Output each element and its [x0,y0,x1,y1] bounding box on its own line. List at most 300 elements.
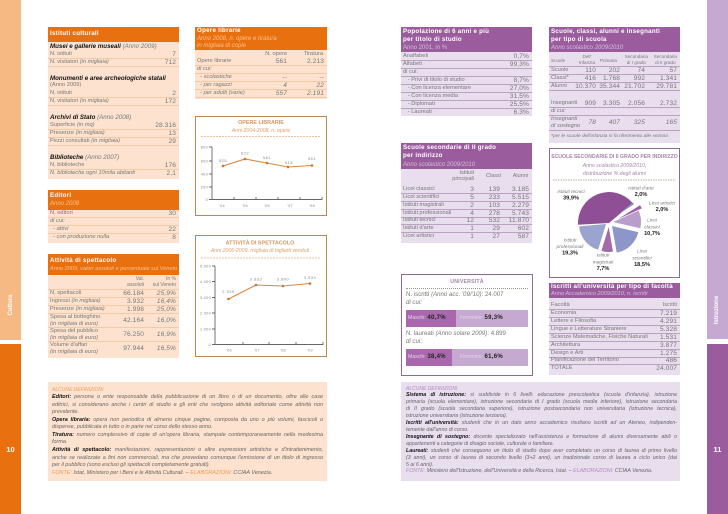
table rows: sul Veneto [153,282,176,288]
table: Monumenti: N. istituti [50,90,72,96]
table rows: N. editori [50,210,73,216]
pie labels: magistrali [593,260,614,266]
table rows: 4 [283,82,287,89]
table rows: 602 [518,225,529,232]
table rows: Licei scientifici [403,194,439,200]
panel: Attività di spettacolo [48,254,179,358]
table rows: 25,5% [510,101,529,108]
pie labels: Istituti tecnici [557,189,586,195]
panel header: per indirizzo [403,152,443,159]
definitions text [406,386,678,474]
table rows: 11.870 [509,217,529,224]
table rows: - Con licenza elementare [408,85,471,91]
axis labels: 1.000 [200,328,211,332]
definitions text: anche se realizzate a fini non commerciali, ma che prevedano comunque l'emissione di un titolo di ingresso [52,454,323,460]
panel header: Popolazione di 6 anni e più [403,28,489,35]
table rows: 5.515 [512,194,529,201]
data line [227,282,311,300]
table: Monumenti: (Anno 2009) [50,82,81,88]
table rows: 16,9% [157,331,176,338]
text: laureati: N. laureati (Anno solare 2009): 4.899 [406,330,506,337]
table rows: Classi [486,173,501,179]
table rows: 5 [470,194,474,201]
panel: Alcune definizioni (cultura) [48,382,327,481]
panel: Istituti culturali [48,27,179,179]
axis labels: '08 [309,204,315,208]
axis labels: 200 [201,186,208,190]
definitions text [52,387,323,476]
panel header: Anno 2001, in % [403,45,447,51]
table rows: di cui: [551,108,566,114]
table rows: 110 [585,67,596,74]
table rows: 416 [585,75,596,82]
table rows: 24.007 [656,365,677,372]
panel: Alcune definizioni (istruzione) [401,382,680,481]
table rows: 139 [489,186,500,193]
panel header: Scuole secondarie di II grado [403,144,496,151]
table rows: Istituti d'arte [403,225,433,231]
panel header: Anno 2008 [50,201,79,207]
definitions text: appartenenti a categorie di disagio sociale, culturale o familiare. [406,441,554,447]
definitions text: Attività di spettacolo: manifestazioni, rappresentazioni o altre espressioni artistiche e d'intrattenimento, [52,447,323,453]
panel header: Istituti culturali [50,30,99,37]
axis labels: '06 [264,204,270,208]
table rows: 29.781 [656,83,677,90]
table rows: 2.056 [628,100,645,107]
panel: Scuole, classi, alunni e insegnanti [549,27,680,143]
table: Musei: 7 [172,51,176,58]
table rows: 5.328 [660,326,677,333]
table rows [195,51,327,98]
table: Archivi di Stato: 13 [168,130,176,137]
table rows: 25,0% [157,306,176,313]
table: Archivi di Stato: 29 [168,138,176,145]
table rows: 76.250 [123,331,144,338]
panel header [48,27,179,42]
table rows: Scuole [551,58,565,63]
chart title: OPERE LIBRARIE [238,120,284,126]
table rows: 22 [316,82,324,89]
table rows: Design e Arti [551,350,583,356]
data labels: 525 [219,158,227,163]
table rows: Ingressi (in migliaia) [50,298,101,304]
table rows: di cui: [50,218,65,224]
table rows [549,54,680,139]
table: Musei: 712 [165,59,176,66]
table rows: Scienze Matematiche, Fisiche Naturali [551,334,648,340]
data labels: 518 [285,160,293,165]
table rows: 25,9% [157,290,176,297]
table rows: 2.279 [512,202,529,209]
panel header: Anno scolastico 2009/2010 [551,45,623,51]
table rows: Lettere e Filosofia [551,318,596,324]
table: Musei: Musei e gallerie museali (Anno 2009) [50,43,157,50]
axis labels [200,264,313,352]
definitions text: primaria (scuola elementare), istruzione secondaria di I grado (scuola media inferiore), istruzione secondaria [406,399,677,405]
table: Archivi di Stato: Pezzi consultati (in migliaia) [50,138,120,144]
table rows: 909 [585,100,596,107]
table rows: Val. [136,276,144,282]
definitions text: Insegnante di sostegno: docente specializzato nell'assistenza e formazione di alunni diversamente abili o [406,434,677,440]
table rows: 27,0% [510,85,529,92]
panel header: Scuole, classi, alunni e insegnanti [551,28,660,35]
table rows: 3.932 [127,298,144,305]
table rows: 2.191 [307,90,324,97]
table: Biblioteche: 176 [165,162,176,169]
definitions text: forma. [52,439,67,445]
axis labels: '08 [280,348,286,352]
table: Monumenti: Monumenti e aree archeologiche statali [50,75,166,82]
table rows: di cui: [197,66,212,72]
table rows: Istituti magistrali [403,202,444,208]
stacked bar: laureati per genere: Maschi: 38,4% [408,354,446,360]
table rows: 22 [168,226,176,233]
chart title: Anni 2004-2008, n. opere [231,128,290,134]
panel header: Iscritti all'università per tipo di facoltà [551,283,673,290]
data line [222,158,313,168]
table: Monumenti: 172 [165,98,176,105]
table rows: (in migliaia di euro) [50,334,98,340]
panel header: Editori [50,192,71,199]
definitions text: prevalente. [52,409,79,415]
pie labels: 2,0% [635,192,647,198]
definitions text: di II grado (scuola secondaria superiore), istruzione postsecondaria non universitaria (istruzione tecnica), [406,406,677,412]
axis labels: 4.000 [200,280,211,284]
panel: Università [401,274,533,376]
definitions text: dispense, pubblicata in tutto o in parte nel corso dello stesso anno. [52,424,213,430]
table rows: assoluti [127,282,144,288]
table rows: 3.185 [512,186,529,193]
table rows: 10.370 [575,83,596,90]
table rows: Scuole [551,67,568,73]
table rows: 2.732 [660,100,677,107]
table rows: Architettura [551,342,580,348]
table: Archivi di Stato: 28.316 [155,122,176,129]
table rows: 21.702 [624,83,645,90]
table rows: 587 [518,233,529,240]
table rows: Economia [551,310,576,316]
table rows: Istituti [460,170,474,176]
definitions text: FONTE: Istat, Ministero per i Beni e le Attività Culturali. – ELABORAZIONI: CCIAA Venezia. [52,470,272,476]
panel header: Anno Accademico 2009/2010, n. iscritti [551,291,648,297]
table rows: 57 [669,67,677,74]
data labels: 561 [308,156,316,161]
table rows: 8,7% [514,77,529,84]
axis labels: 3.000 [200,296,211,300]
axis labels [201,146,315,208]
table rows: Alunni [551,83,567,89]
table: Archivi di Stato: Archivi di Stato (Anno 2008) [50,114,131,121]
table rows: Volume d'affari [50,342,87,348]
panel header [48,190,179,210]
table: Monumenti [48,75,179,106]
axis labels: 400 [201,172,208,176]
table: Biblioteche: N. biblioteche [50,162,84,168]
table rows: Spesa del pubblico [50,328,98,334]
stacked bar: iscritti per genere [406,310,528,327]
table rows: 5.743 [512,210,529,217]
table rows: *per le scuole dell'infanzia si fa riferimento alle sezioni. [551,134,669,139]
table rows [48,210,179,241]
table rows: Secondaria [654,54,677,59]
table rows: Secondaria [625,54,648,59]
table rows: di cui: [403,69,418,75]
panel: Opere librarie [195,27,327,99]
pie labels: 39,9% [563,196,579,202]
table rows: 992 [634,75,645,82]
table: Archivi di Stato: Superficie (in mq) [50,122,95,128]
axis labels: 5.000 [200,264,211,268]
table rows: 1.341 [660,75,677,82]
panel header [401,143,532,169]
text: iscritti: N. iscritti (Anno acc. '09/'10): 24.007 [406,291,504,298]
table rows: principali [452,176,474,182]
table rows: 3.877 [660,342,677,349]
data labels: 622 [241,150,249,156]
axes [212,266,323,345]
pie labels: 7,7% [597,266,609,272]
table rows: Insegnanti [551,116,577,122]
panel header: Anno scolastico 2009/2010 [403,162,475,168]
text: iscritti [406,291,504,306]
pie labels: 2,0% [656,207,668,213]
chart title [210,240,310,254]
table: Biblioteche: N. biblioteche ogni 10mila abitanti [50,170,135,176]
table rows: 3.305 [603,100,620,107]
table rows: 16,5% [157,345,176,352]
table: Monumenti: N. visitatori (in migliaia) [50,98,109,104]
pie slices [578,192,642,253]
page tab: 11: 11 [714,445,721,454]
definitions text: per il pubblico (sono esclusi gli spettacoli completamente gratuiti). [52,462,210,468]
table rows: Licei artistici [403,233,434,239]
table rows: 532 [489,217,500,224]
table rows: 1.998 [127,306,144,313]
pie title: distribuzione % degli alunni [583,171,647,177]
axis labels: 800 [201,146,208,150]
table rows: - per adulti (varie) [200,90,245,96]
table rows [401,170,532,240]
side label: Istruzione: Istruzione [714,296,720,324]
table rows: Insegnanti [551,100,577,106]
panel: Iscritti all'università per tipo di facoltà [549,283,680,375]
table rows [549,302,680,372]
table rows: 0,7% [514,53,529,60]
data labels: 3.800 [277,276,290,282]
table rows: 16,0% [157,317,176,324]
table: Archivi di Stato: Presenze (in migliaia) [50,130,105,136]
definitions text: Editori: persona o ente responsabile della pubblicazione di un libro o di un documento, oltre alle case [52,394,323,400]
table rows: - con produzione nulla [53,234,109,240]
table rows: Presenze (in migliaia) [50,306,105,312]
table rows: (in migliaia di euro) [50,320,98,326]
axes [209,147,322,200]
pie title: Anno scolastico 2009/2010, [582,163,646,169]
table rows: Facoltà [551,302,570,308]
table rows: 97.944 [123,345,144,352]
definitions text: editrici, si considerano anche i centri di studio e gli enti che svolgono attività editoriale come attività non [52,402,323,408]
panel header [549,27,680,52]
data labels: 2.936 [222,289,235,294]
table rows: - Diplomati [408,101,435,107]
table rows: 66.184 [123,290,144,297]
definitions text: istruzione universitaria (istruzione terziaria). [406,413,507,419]
pie title: SCUOLE SECONDARIE DI II GRADO PER INDIRIZZO [551,154,678,160]
table rows: 6,3% [514,109,529,116]
panel header [549,283,680,298]
table rows: Spesa al botteghino [50,314,100,320]
pie labels: 18,5% [634,262,650,268]
table rows: 7.219 [660,310,677,317]
definitions text: ALCUNE DEFINIZIONI [406,386,457,392]
data labels [219,150,316,165]
table: Musei: N. visitatori (in migliaia) [50,59,109,65]
axis labels: '09 [307,348,313,352]
panel header: Anno 2009, valori assoluti e percentuale sul Veneto [50,266,177,272]
axis labels: 600 [201,160,208,164]
panel header [195,27,327,50]
table rows: N. spettacoli [50,290,81,296]
data labels: 581 [263,155,271,160]
definitions text: Laureati: studenti che conseguono un titolo di studio dopo aver completato un corso di laurea di primo livello [406,448,677,454]
side band: Cultura [0,0,21,340]
panel header [48,254,179,275]
table rows: 35.344 [599,83,620,90]
table rows: 325 [634,119,645,126]
panel header: per tipo di scuola [551,36,607,43]
table rows: -- [282,74,287,81]
table rows: In % [166,276,176,282]
data labels [222,275,317,294]
text: laureati [406,330,506,345]
table rows: Classi* [551,75,569,81]
table: Monumenti: 2 [172,90,176,97]
table: Archivi di Stato [48,114,179,146]
pie labels [556,186,676,272]
table rows: Iscritti [663,302,677,308]
table rows: 103 [489,202,500,209]
definitions text: Tiratura: numero complessivo di copie di un'opera libraria, stampate contemporaneamente nella medesima [52,432,323,438]
panel: Scuole secondarie di II grado [401,143,532,243]
table rows: 1 [470,233,474,240]
definitions text: ALCUNE DEFINIZIONI [52,387,103,393]
side label: Cultura: Cultura [8,294,14,316]
page tab: 10: 10 [6,445,15,454]
definitions text: 5 ai 6 anni). [406,462,433,468]
pie labels: scientifici [632,256,653,262]
pie labels: Licei artistici [649,200,676,206]
definitions text: temente dall'anno di corso. [406,427,469,433]
table rows: Alunni [513,173,528,179]
page tab: 10 [0,344,21,514]
table rows: 4 [470,210,474,217]
table rows [401,53,532,116]
table rows: -- [319,74,324,81]
pie labels: Licei [637,248,648,254]
definitions text: FONTE: Ministero dell'Istruzione, dell'Università e della Ricerca, Istat. – ELABORAZIONI: CCIAA Venezia. [406,468,652,474]
panel header: Opere librarie [197,27,241,34]
table rows: 165 [666,119,677,126]
table rows: 99,3% [510,61,529,68]
axis labels: 2.000 [200,312,211,316]
table rows: Opere librarie [197,58,231,64]
panel header: Attività di spettacolo [50,257,116,264]
table rows: 407 [609,119,620,126]
definitions text: Iscritti all'università: studenti che in un dato anno accademico risultano iscritti ad un Ateneo, indipenden- [406,420,677,426]
table rows: Alfabeti [403,61,422,67]
pie labels: Istituti [564,238,577,244]
table: Biblioteche: Biblioteche (Anno 2007) [50,154,119,161]
table rows: - Laureati [408,109,432,115]
table rows: 486 [666,357,677,364]
table rows: di I grado [627,60,646,65]
table: Biblioteche [48,154,179,177]
side band: Istruzione [707,0,728,339]
table rows: - attivi [53,226,68,232]
axis labels: '06 [226,348,232,352]
table rows: 8 [172,234,176,241]
line chart: Opere librarie 2004-2008 [195,116,327,216]
stacked bar: iscritti per genere: Femmine: 59,3% [460,315,503,321]
table rows: Analfabeti [403,53,428,59]
pie labels: classici [644,224,661,230]
table rows: 31,5% [510,93,529,100]
table rows: di sostegno [551,123,580,129]
pie labels: 10,7% [644,231,660,237]
table rows: - per ragazzi [200,82,232,88]
pie labels: Licei [647,218,658,224]
table rows: 74 [637,67,645,74]
table rows: 1.768 [603,75,620,82]
table rows: 30 [168,210,176,217]
text: laureati: di cui: [406,338,422,345]
chart title [231,120,290,134]
table rows: 557 [276,90,287,97]
table rows [48,276,179,354]
data labels: 3.833 [250,276,263,282]
table rows: 202 [609,67,620,74]
stacked bar: laureati per genere: Femmine: 61,6% [460,354,503,360]
panel: pie chart Scuole secondarie di II grado per indirizzo [549,148,680,278]
definitions text: (3 anni), un corso di laurea di secondo livello (3+2 anni), un tradizionale corso di laurea a ciclo unico (dai [406,455,677,461]
chart title: ATTIVITÀ DI SPETTACOLO [226,240,294,246]
panel title: UNIVERSITÀ [450,279,484,285]
table rows: 1 [470,225,474,232]
table rows: 4.291 [660,318,677,325]
pie labels: 19,3% [562,250,578,256]
panel: Popolazione per titolo di studio [401,27,532,116]
panel header [401,27,532,52]
axis labels: '04 [219,204,225,208]
pie labels: Istituti [597,252,610,258]
table rows: 233 [489,194,500,201]
table rows: 2.213 [307,58,324,65]
table rows: 2 [470,202,474,209]
table rows: 42.164 [123,317,144,324]
table rows: (in migliaia di euro) [50,348,98,354]
panel: Editori [48,190,179,243]
table: Biblioteche: 2,1 [167,170,176,177]
table: Musei: N. istituti [50,51,72,57]
line chart: Attività di spettacolo 2006-2009 [195,235,327,357]
table rows: 16,4% [157,298,176,305]
table rows: TOTALE [551,365,573,371]
stacked bar: iscritti per genere: Maschi: 40,7% [408,315,446,321]
panel header: Anno 2008, n. opere e tiratura [197,36,277,42]
table: Musei [48,43,179,67]
table rows: di II grado [655,60,676,65]
table rows: 78 [588,119,596,126]
